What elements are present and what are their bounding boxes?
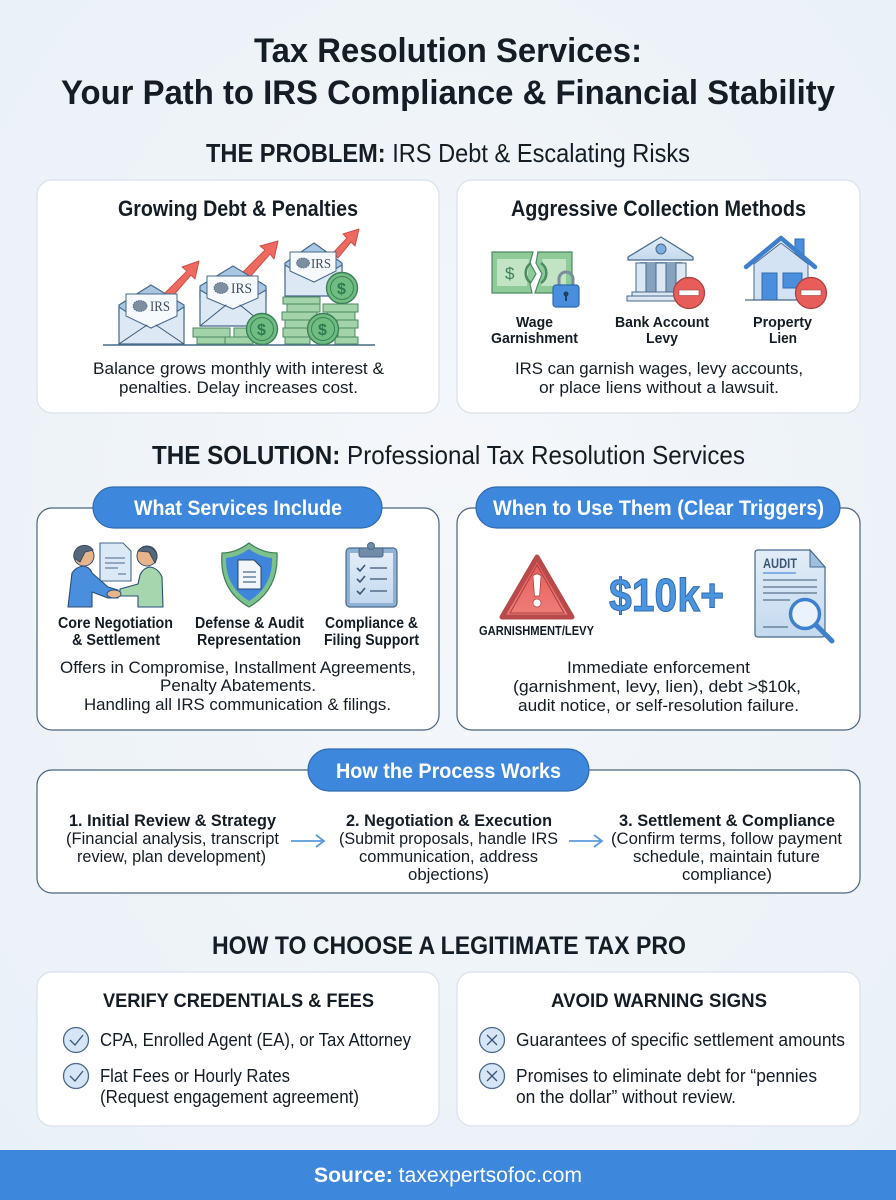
icon: torn money with lock: $ — [505, 264, 515, 283]
panel heading: verify credentials: VERIFY CREDENTIALS & FEES — [103, 991, 374, 1012]
label: wage garnishment: Wage — [516, 314, 553, 331]
icon: audit document with magnifier — [755, 550, 832, 641]
panel: when to use them — [457, 487, 860, 730]
title — [61, 32, 835, 112]
step 3: (Confirm terms, follow payment — [611, 829, 842, 848]
text: collection description — [515, 359, 803, 397]
icon: envelopes, rising arrows and money stacks — [103, 229, 375, 345]
panel: growing debt and penalties — [37, 180, 439, 413]
label: wage garnishment: Garnishment — [491, 330, 578, 347]
panel heading: aggressive collection: Aggressive Collection Methods — [511, 196, 806, 221]
icon: envelopes, rising arrows and money stacks: $ — [257, 322, 266, 339]
label: bank account levy: Levy — [646, 330, 679, 347]
text: promises — [516, 1066, 817, 1107]
text: services description — [60, 658, 416, 714]
step 1: review, plan development) — [77, 847, 266, 866]
panel: how the process works — [37, 749, 860, 893]
pill: how the process works — [308, 749, 589, 791]
step 1: (Financial analysis, transcript — [66, 829, 279, 848]
icon: warning triangle — [502, 557, 572, 617]
step 2: objections) — [408, 865, 489, 884]
text: growing debt description: Balance grows monthly with interest & — [93, 359, 385, 378]
text: fees: Flat Fees or Hourly Rates — [100, 1066, 290, 1086]
text: guarantees: Guarantees of specific settlement amounts — [516, 1030, 845, 1050]
step 3 — [611, 811, 842, 884]
label: garnishment levy: GARNISHMENT/LEVY — [479, 624, 595, 638]
text: collection description: IRS can garnish wages, levy accounts, — [515, 359, 803, 378]
pill: when to use them: When to Use Them (Clear Triggers) — [493, 496, 824, 520]
icon: envelopes, rising arrows and money stacks: $ — [318, 322, 327, 339]
heading: how to choose a legitimate tax pro: HOW TO CHOOSE A LEGITIMATE TAX PRO — [212, 932, 686, 960]
heading: the solution: THE SOLUTION: Professional Tax Resolution Services — [152, 440, 745, 470]
text: promises: Promises to eliminate debt for “pennies — [516, 1066, 817, 1086]
label: defense and audit: Representation — [197, 632, 301, 649]
text: growing debt description: penalties. Delay increases cost. — [119, 378, 358, 397]
label: compliance and filing — [324, 615, 419, 649]
step 3: compliance) — [682, 865, 772, 884]
step 3: schedule, maintain future — [633, 847, 820, 866]
arrow: step 1 to step 2 — [291, 835, 324, 847]
icon: envelopes, rising arrows and money stacks: IRS — [150, 299, 170, 315]
panel heading: growing debt: Growing Debt & Penalties — [118, 196, 358, 221]
label: wage garnishment — [491, 314, 578, 347]
icon: bank with minus badge — [627, 237, 704, 308]
text: services description: Offers in Compromise, Installment Agreements, — [60, 658, 416, 677]
label: compliance and filing: Compliance & — [325, 615, 418, 632]
label: compliance and filing: Filing Support — [324, 632, 419, 649]
icon: check 1 — [64, 1028, 88, 1052]
icon: cross 1 — [480, 1028, 504, 1052]
label: defense and audit: Defense & Audit — [195, 615, 304, 632]
panel heading: avoid warning signs: AVOID WARNING SIGNS — [551, 991, 767, 1012]
title: Tax Resolution Services: — [254, 32, 642, 70]
label: core negotiation: & Settlement — [72, 632, 160, 649]
step 2: (Submit proposals, handle IRS — [339, 829, 558, 848]
step 2: communication, address — [359, 847, 538, 866]
icon: envelopes, rising arrows and money stacks: IRS — [311, 257, 331, 272]
text: services description: Handling all IRS communication & filings. — [84, 695, 391, 714]
panel: verify credentials and fees — [37, 972, 439, 1126]
icon: check 2 — [64, 1064, 88, 1088]
label: bank account levy: Bank Account — [615, 314, 709, 331]
text: triggers description: audit notice, or self-resolution failure. — [518, 696, 799, 715]
icon: clipboard checklist — [346, 542, 397, 607]
label: property lien — [753, 314, 813, 347]
footer: source — [0, 1150, 896, 1200]
pill: what services include: What Services Include — [134, 496, 342, 520]
icon: envelopes, rising arrows and money stacks: $ — [337, 281, 346, 298]
label: core negotiation: Core Negotiation — [58, 615, 173, 632]
heading: the problem: THE PROBLEM: IRS Debt & Escalating Risks — [206, 138, 690, 168]
icon: handshake over document — [68, 543, 163, 607]
step 1: 1. Initial Review & Strategy — [69, 811, 277, 830]
step 2: 2. Negotiation & Execution — [346, 811, 552, 830]
panel: avoid warning signs — [457, 972, 860, 1126]
step 2 — [339, 811, 558, 884]
label: core negotiation — [58, 615, 173, 649]
step 3: 3. Settlement & Compliance — [619, 811, 835, 830]
icon: cross 2 — [480, 1064, 504, 1088]
arrow: step 2 to step 3 — [569, 835, 602, 847]
text: services description: Penalty Abatements. — [160, 676, 316, 695]
panel: what services include — [37, 487, 439, 730]
footer: source: Source: taxexpertsofoc.com — [314, 1164, 582, 1187]
pill: how the process works: How the Process Works — [336, 759, 561, 783]
label: property lien: Property — [753, 314, 813, 331]
panel: aggressive collection methods — [457, 180, 860, 413]
icon: envelopes, rising arrows and money stacks: IRS — [231, 281, 252, 297]
text: promises: on the dollar” without review. — [516, 1087, 736, 1107]
label: property lien: Lien — [769, 330, 797, 347]
pill: what services include — [93, 487, 382, 528]
step 1 — [66, 811, 279, 866]
icon: audit document with magnifier: AUDIT — [763, 555, 797, 571]
text: credentials: CPA, Enrolled Agent (EA), or Tax Attorney — [100, 1030, 411, 1050]
pill: when to use them — [476, 487, 840, 528]
title: Your Path to IRS Compliance & Financial Stability — [61, 74, 835, 112]
icon: shield with document — [222, 543, 277, 607]
text: fees — [100, 1066, 359, 1107]
label: bank account levy — [615, 314, 709, 347]
text: triggers description — [513, 658, 801, 715]
text: triggers description: (garnishment, levy, lien), debt >$10k, — [513, 677, 801, 696]
icon: ten thousand dollars plus: $10k+ — [609, 569, 724, 621]
text: fees: (Request engagement agreement) — [100, 1087, 359, 1107]
text: growing debt description — [93, 359, 385, 397]
icon: house with minus badge — [745, 238, 826, 308]
icon: torn money with lock — [492, 252, 579, 307]
label: defense and audit — [195, 615, 304, 649]
text: triggers description: Immediate enforcement — [567, 658, 750, 677]
text: collection description: or place liens without a lawsuit. — [539, 378, 779, 397]
